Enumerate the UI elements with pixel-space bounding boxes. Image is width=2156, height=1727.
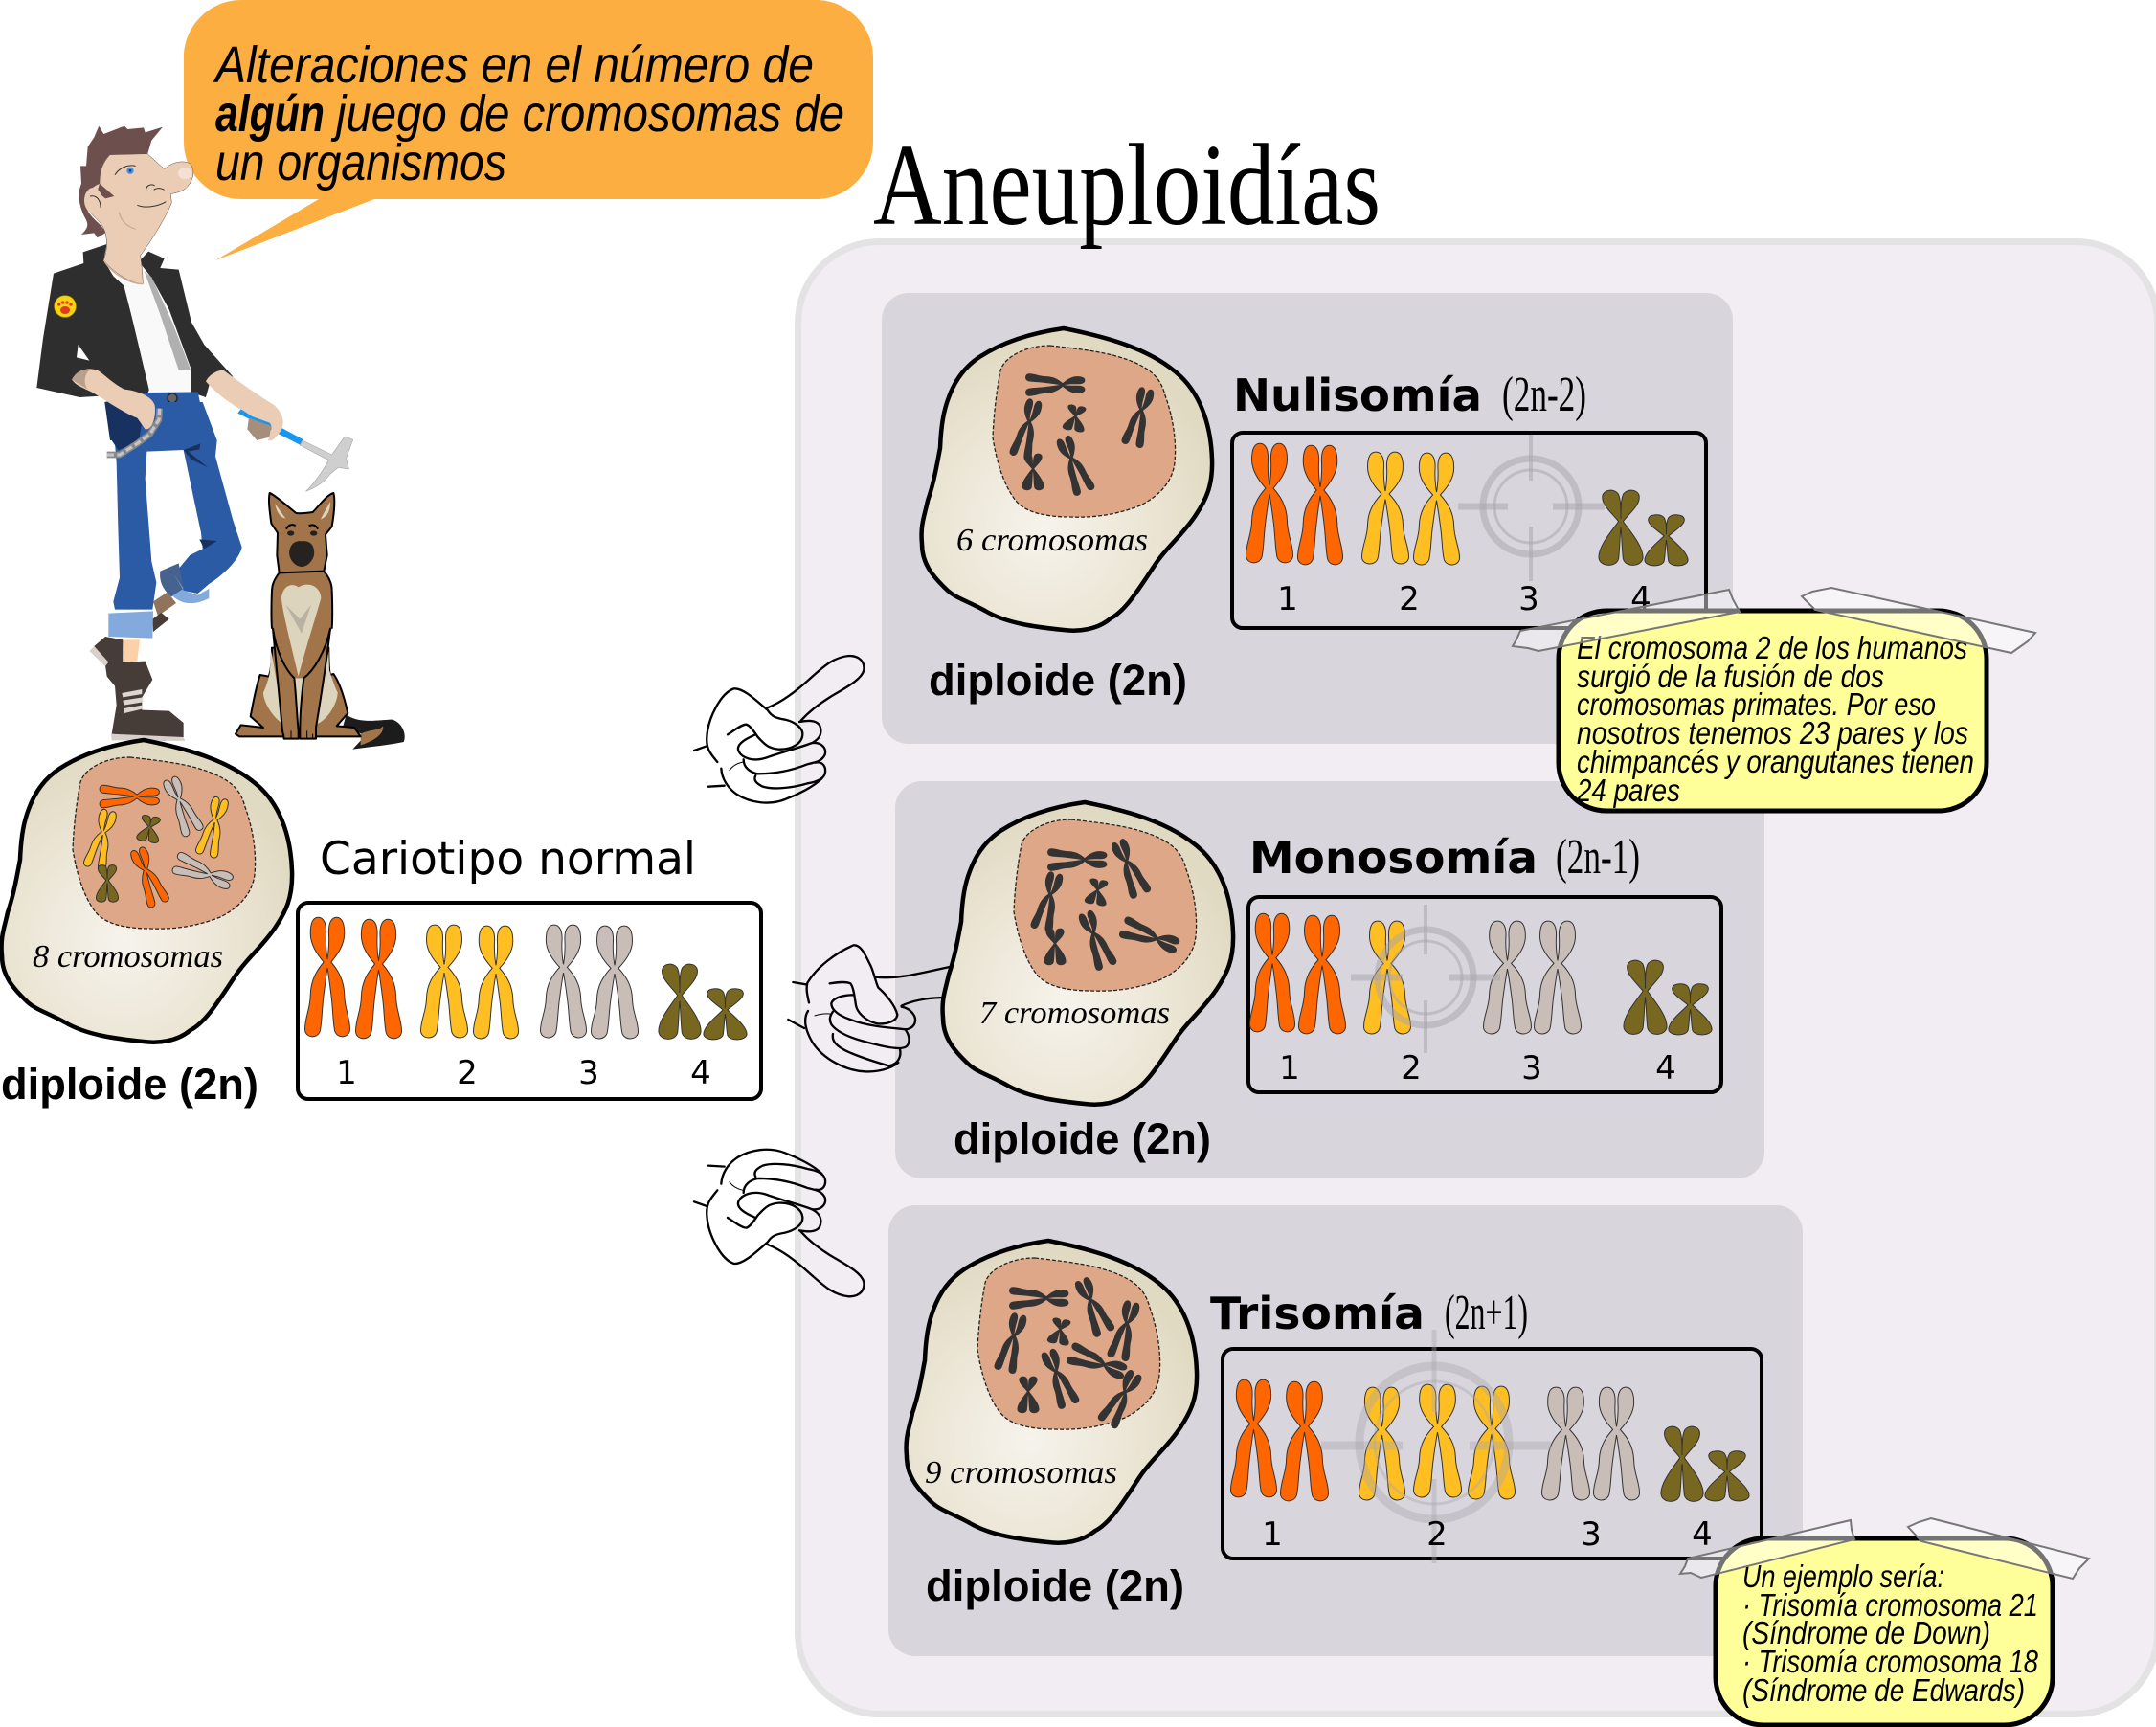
callout text: (Síndrome de Edwards) [1742,1672,2025,1708]
callout: ejemplo note [1680,1518,2089,1725]
karyotype: trisomía [1223,1330,1762,1563]
karyotype: monosomía: 1 [1279,1049,1300,1088]
bubble text: un organismos [215,134,506,191]
illustration: dog [236,493,405,750]
karyotype: trisomía: 4 [1692,1515,1713,1554]
panel: aneuploidías background [798,241,2156,1714]
karyotype: nulisomía: 3 [1518,580,1539,618]
karyotype: monosomía: 2 [1401,1049,1422,1088]
callout text [1576,630,1974,808]
tape strips [1680,1518,2089,1579]
target: extra chromosome 2 [1321,1330,1551,1563]
target: missing chromosome 2 [1351,905,1500,1053]
heading: trisomía [1210,1286,1528,1340]
cell: trisomía 9 chromosomes [907,1241,1197,1543]
karyotype: normal: 2 [457,1054,478,1092]
heading: nulisomía: (2n-2) [1502,368,1586,422]
illustration: man with hammer and chain [36,126,353,741]
label: 8 cromosomas: 8 cromosomas [33,939,223,975]
karyotype: normal: 1 [336,1054,357,1092]
callout text: surgió de la fusión de dos [1577,659,1884,694]
karyotype: monosomía [1248,897,1721,1092]
callout text [1742,1559,2039,1708]
callout text: (Síndrome de Down) [1742,1615,1990,1650]
speech bubble [184,0,873,260]
label: diploide trisomía: diploide (2n) [926,1561,1184,1610]
karyotype: nulisomía [1232,433,1706,628]
heading: nulisomía: Nulisomía [1233,370,1482,421]
label: diploide monosomía: diploide (2n) [954,1114,1211,1163]
heading: monosomía [1249,830,1640,885]
tape strips [1513,588,2035,653]
karyotype: trisomía: 3 [1581,1515,1602,1554]
icon: hand holding monosomía cell [788,945,953,1071]
icon: hand pointing to trisomía [694,1150,864,1296]
bubble text [213,36,844,191]
callout text: cromosomas primates. Por eso [1577,686,1936,722]
label: 7 cromosomas: 7 cromosomas [979,996,1170,1031]
target: missing chromosome 3 [1458,435,1605,581]
bubble text: juego de cromosomas de [330,85,844,143]
callout text: Un ejemplo sería: [1742,1559,1944,1594]
heading: nulisomía [1233,368,1586,422]
label: 9 cromosomas: 9 cromosomas [925,1455,1117,1491]
karyotype: monosomía: 3 [1521,1049,1542,1088]
label: diploide normal: diploide (2n) [1,1060,258,1109]
callout text: nosotros tenemos 23 pares y los [1577,715,1968,751]
panel: nulisomía [882,293,1733,744]
callout text: chimpancés y orangutanes tienen [1577,744,1974,779]
heading: trisomía: (2n+1) [1445,1286,1528,1340]
label: diploide nulisomía: diploide (2n) [929,656,1187,705]
karyotype: trisomía: 2 [1426,1515,1448,1554]
cell: normal 8 chromosomes [2,740,292,1043]
callout text: · Trisomía cromosoma 18 [1742,1644,2039,1679]
bubble text: Alteraciones en el número de [213,36,814,94]
bubble text: algún [215,85,325,143]
karyotype: normal: 3 [578,1054,599,1092]
chromosomes in nucleus [994,1275,1146,1430]
cell: monosomía 7 chromosomes [943,802,1233,1105]
heading: cariotipo normal: Cariotipo normal [320,833,696,886]
karyotype: trisomía: 1 [1262,1515,1283,1554]
karyotype: nulisomía: 4 [1630,580,1651,618]
heading: trisomía: Trisomía [1210,1288,1425,1339]
icon: hand pointing to nulisomía [694,656,864,803]
karyotype: nulisomía: 1 [1277,580,1298,618]
panel: monosomía [895,781,1764,1178]
callout: cromosoma 2 note [1513,588,2035,811]
chromosomes in nucleus [1009,373,1157,497]
cell: nulisomía 6 chromosomes [922,328,1212,631]
chromosomes in nucleus [1030,837,1182,972]
callout text: · Trisomía cromosoma 21 [1742,1587,2038,1623]
heading: monosomía: Monosomía [1249,832,1538,884]
karyotype: monosomía: 4 [1655,1049,1676,1088]
karyotype: nulisomía: 2 [1399,580,1420,618]
heading: monosomía: (2n-1) [1556,830,1640,885]
label: 6 cromosomas: 6 cromosomas [956,523,1148,558]
callout text: El cromosoma 2 de los humanos [1577,630,1967,665]
panel: trisomía [888,1205,1803,1656]
callout text: 24 pares [1576,773,1680,808]
chromosomes in nucleus [83,774,236,908]
karyotype: normal [298,903,761,1099]
karyotype: normal: 4 [690,1054,711,1092]
title: Aneuploidías [873,121,1381,250]
